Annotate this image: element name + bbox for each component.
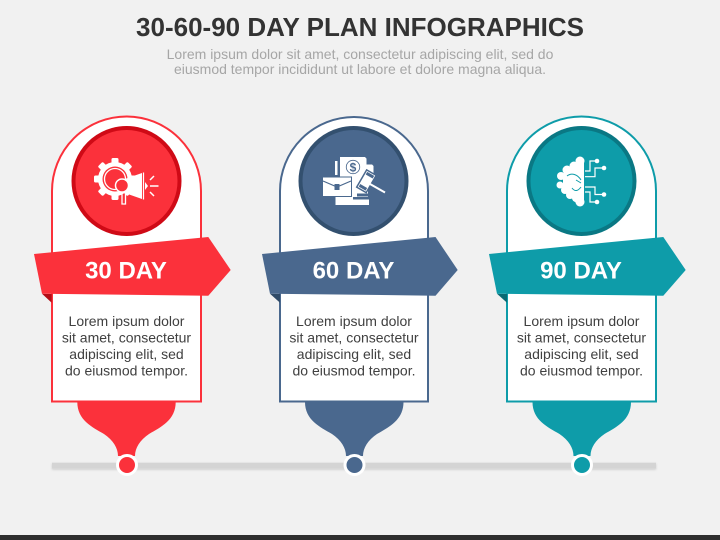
- timeline marker: 90 day: [572, 456, 592, 474]
- funnel connector: 60 day: [305, 402, 404, 456]
- ribbon: 90 day: [489, 237, 686, 296]
- subtitle text: Lorem ipsum dolor sit amet, consectetur adipiscing elit, sed do: [167, 46, 553, 62]
- icon circle: 60 day: [300, 128, 406, 234]
- subtitle text: eiusmod tempor incididunt ut labore et dolore magna aliqua.: [174, 61, 546, 77]
- icon circle: 90 day: [528, 128, 634, 234]
- timeline marker: 60 day: [345, 456, 364, 474]
- card: 30 day: [52, 116, 201, 402]
- card text: 30 day: sit amet, consectetur: [62, 330, 191, 346]
- icon: gear and megaphone: [94, 158, 158, 204]
- ribbon fold: 30 day: [42, 294, 52, 303]
- ribbon: 30 day: [34, 237, 231, 296]
- icon: documents, briefcase and gavel: [322, 157, 385, 205]
- icon: documents, briefcase and gavel: $: [350, 160, 357, 174]
- title: 30-60-90 DAY PLAN INFOGRAPHICS: [136, 12, 584, 42]
- icon: brain and circuit: [556, 156, 606, 206]
- card text: 90 day: Lorem ipsum dolor: [524, 313, 640, 329]
- panel: 90 day: [489, 116, 686, 474]
- timeline marker: 30 day: [118, 456, 136, 474]
- ribbon: 60 day: [262, 237, 458, 296]
- icon circle: 30 day: [74, 128, 180, 234]
- card text: 30 day: Lorem ipsum dolor: [69, 313, 185, 329]
- card text: 60 day: do eiusmod tempor.: [293, 362, 415, 378]
- panel: 60 day: [262, 117, 458, 474]
- card text: 60 day: Lorem ipsum dolor: [296, 313, 412, 329]
- card: 90 day: [507, 116, 656, 402]
- ribbon label: 90 day: 90 DAY: [540, 258, 622, 284]
- subtitle text: [167, 46, 553, 77]
- card text: 90 day: do eiusmod tempor.: [520, 362, 643, 378]
- timeline bar: [52, 463, 656, 469]
- ribbon fold: 60 day: [270, 294, 280, 303]
- card text: 60 day: adipiscing elit, sed: [297, 346, 411, 362]
- ribbon label: 60 day: 60 DAY: [313, 258, 394, 284]
- footer bar: [0, 535, 720, 540]
- ribbon fold: 90 day: [497, 294, 507, 303]
- panel: 30 day: [34, 116, 231, 474]
- card: 60 day: [280, 117, 428, 402]
- card text: 60 day: sit amet, consectetur: [289, 330, 419, 346]
- card text: 30 day: adipiscing elit, sed: [69, 346, 184, 362]
- card text: 90 day: adipiscing elit, sed: [524, 346, 639, 362]
- card text: 90 day: sit amet, consectetur: [517, 330, 646, 346]
- funnel connector: 30 day: [77, 402, 176, 456]
- card text: 30 day: do eiusmod tempor.: [65, 362, 188, 378]
- ribbon label: 30 day: 30 DAY: [85, 258, 167, 284]
- funnel connector: 90 day: [532, 402, 631, 456]
